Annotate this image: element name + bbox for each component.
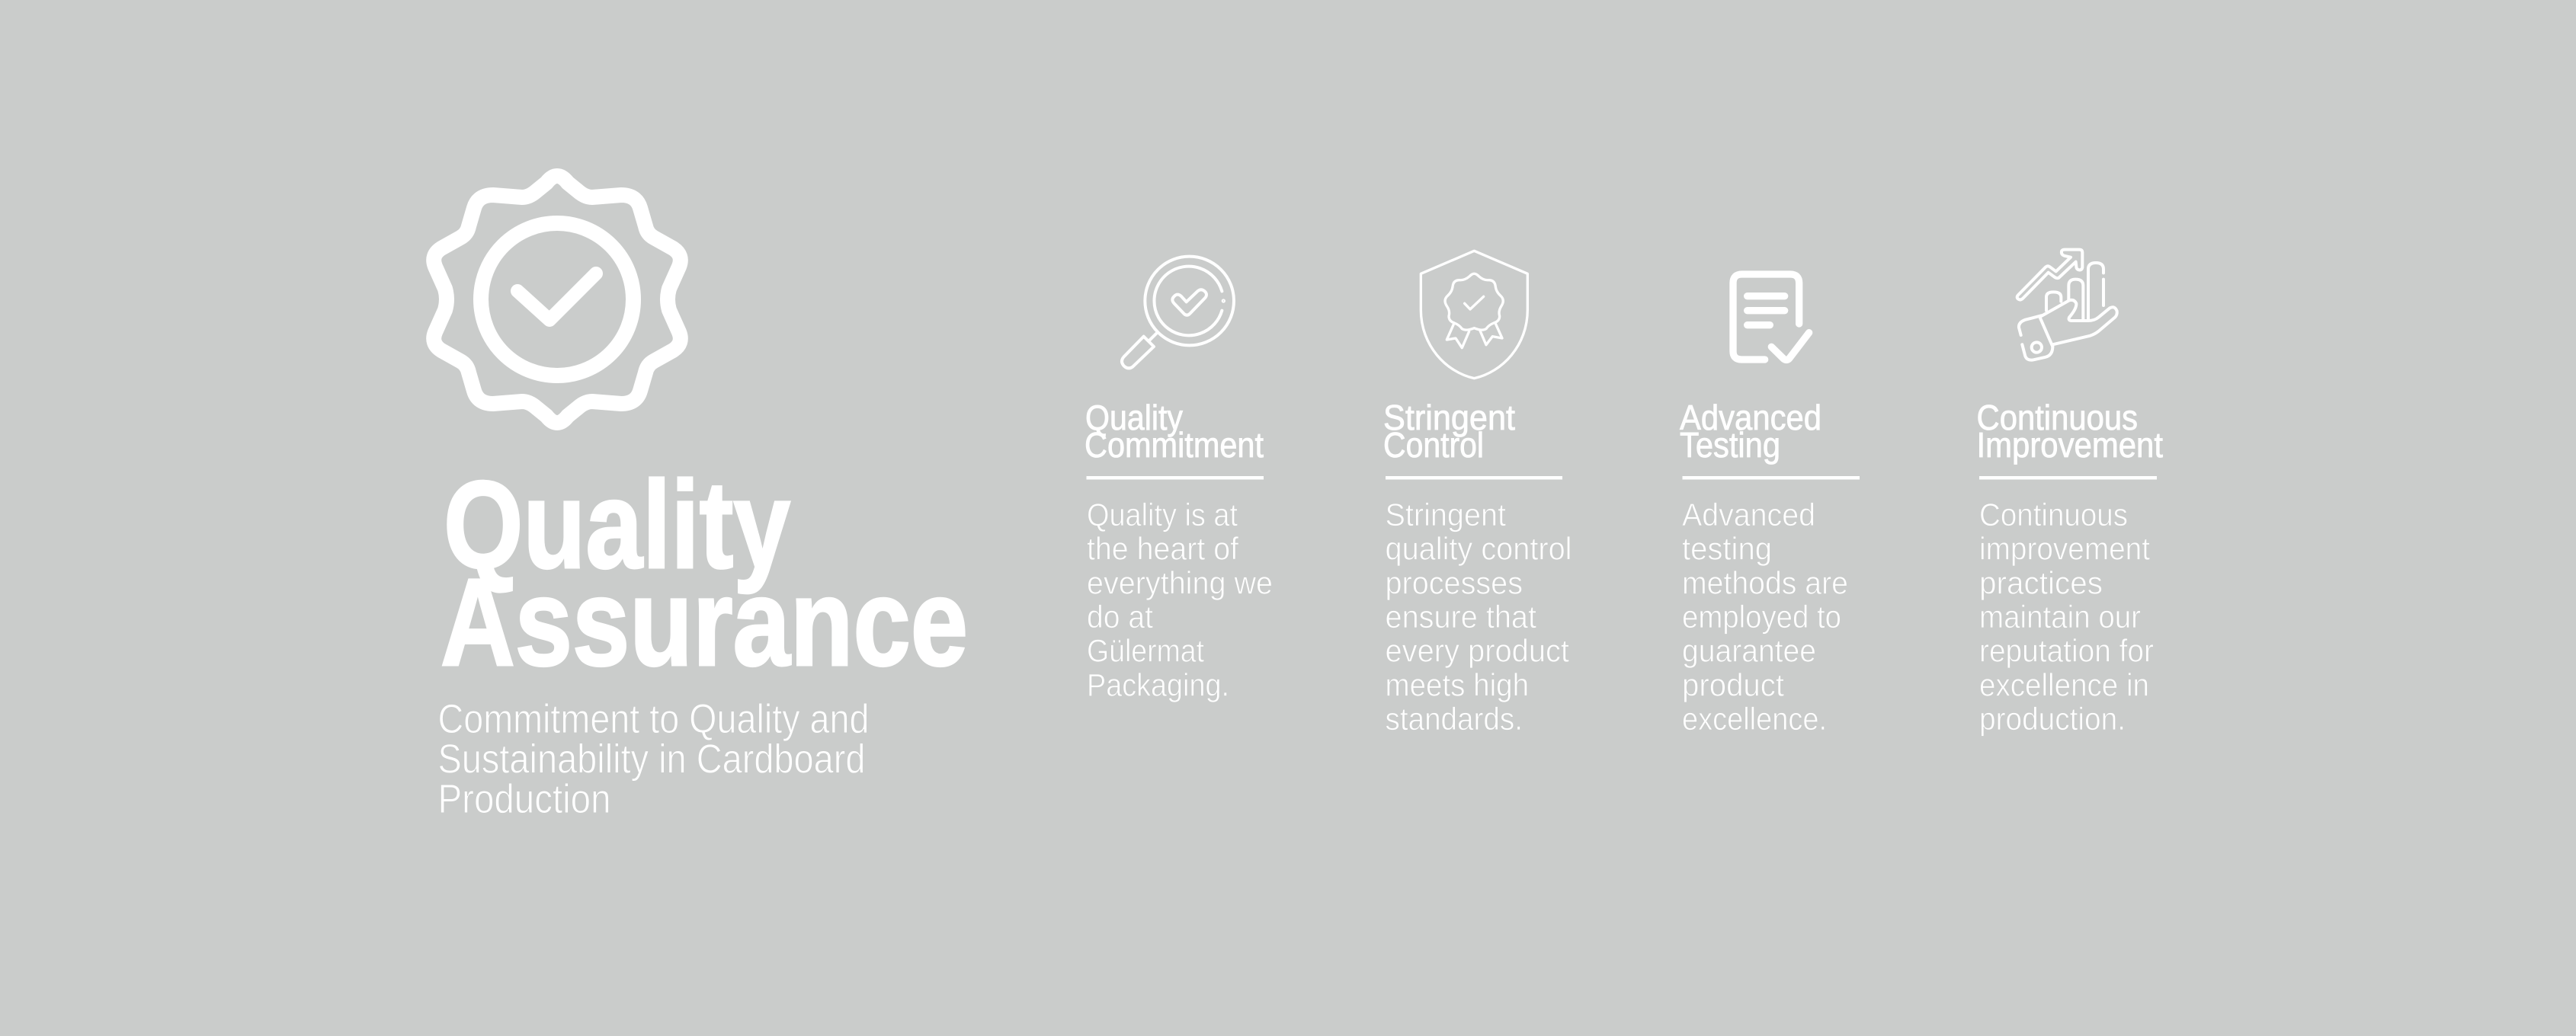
heading (1383, 398, 1515, 465)
title (441, 455, 968, 692)
description: testing (1682, 531, 1772, 567)
description: excellence in (1979, 667, 2149, 702)
heading: Testing (1680, 425, 1780, 465)
heading (1680, 398, 1821, 465)
description: Advanced (1682, 497, 1815, 532)
panel: main heading block (434, 176, 968, 822)
description: everything we (1087, 564, 1273, 600)
subtitle (437, 696, 869, 822)
heading (1085, 398, 1264, 465)
description: the heart of (1087, 531, 1238, 567)
heading: Advanced (1680, 398, 1821, 437)
description: maintain our (1979, 599, 2141, 635)
description: guarantee (1682, 633, 1816, 669)
panel: continuous improvement (1977, 250, 2163, 737)
description: Continuous (1979, 497, 2128, 532)
description: standards. (1386, 701, 1523, 737)
description: Quality is at (1087, 497, 1238, 532)
description: quality control (1386, 531, 1572, 567)
panel: advanced testing (1680, 274, 1860, 737)
description: Stringent (1386, 497, 1506, 532)
description: processes (1386, 564, 1523, 600)
description (1087, 497, 1273, 702)
description: practices (1979, 564, 2103, 600)
panel: stringent control (1383, 251, 1572, 737)
icon: hand with growth chart (2017, 250, 2117, 360)
panel: quality commitment (1085, 257, 1273, 702)
description: do at (1087, 599, 1153, 635)
title: Assurance (441, 552, 968, 692)
subtitle: Sustainability in Cardboard (437, 736, 866, 782)
subtitle: Production (437, 776, 611, 822)
description: production. (1979, 701, 2126, 737)
description: improvement (1979, 531, 2150, 567)
heading (1977, 398, 2163, 465)
description: Packaging. (1087, 667, 1229, 702)
description: Gülermat (1087, 633, 1204, 669)
description: excellence. (1682, 701, 1827, 737)
icon: shield with rosette (1421, 251, 1527, 379)
description (1386, 497, 1572, 737)
title: Quality (444, 455, 790, 594)
heading: Improvement (1977, 425, 2163, 465)
description: ensure that (1386, 599, 1536, 635)
icon: magnifying glass with check (1122, 257, 1234, 368)
description (1682, 497, 1848, 737)
heading: Control (1383, 425, 1484, 465)
description (1979, 497, 2154, 737)
description: meets high (1386, 667, 1529, 702)
heading: Continuous (1977, 398, 2138, 437)
heading: Stringent (1383, 398, 1515, 437)
subtitle: Commitment to Quality and (437, 696, 869, 742)
heading: Quality (1085, 398, 1184, 437)
icon: quality badge with check (434, 176, 681, 423)
description: methods are (1682, 564, 1848, 600)
description: reputation for (1979, 633, 2154, 669)
description: every product (1386, 633, 1569, 669)
description: employed to (1682, 599, 1841, 635)
description: product (1682, 667, 1784, 702)
heading: Commitment (1085, 425, 1264, 465)
icon: document with check (1733, 274, 1809, 360)
